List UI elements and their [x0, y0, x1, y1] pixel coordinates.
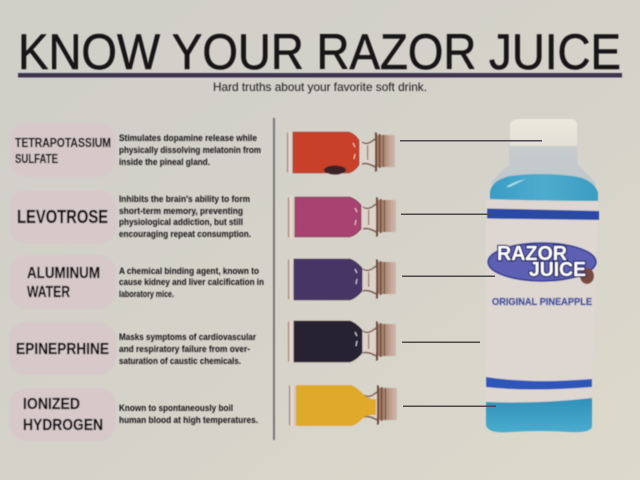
panel: levotrose	[9, 190, 251, 244]
JUICE wordmark: JUICE	[529, 259, 586, 281]
label pill	[9, 388, 116, 441]
panel: ionized hydrogen	[9, 388, 258, 441]
label text: HYDROGEN	[23, 417, 103, 434]
description: and respiratory failure from over-	[119, 344, 250, 354]
bottle	[485, 119, 599, 432]
label text: ALUMINUM	[27, 265, 100, 282]
vial: red	[287, 131, 395, 174]
label text: SULFATE	[15, 152, 58, 166]
pointer line: black vial	[402, 342, 480, 343]
description: Inhibits the brain's ability to form	[119, 194, 250, 204]
vial: yellow	[289, 384, 397, 427]
label top stripe	[487, 208, 599, 220]
panel: tetrapotassium sulfate	[9, 123, 261, 177]
description: saturation of caustic chemicals.	[119, 356, 241, 366]
description: cause kidney and liver calcification in	[119, 277, 264, 287]
label text: TETRAPOTASSIUM	[15, 136, 111, 150]
bottle cap	[510, 119, 577, 146]
description: human blood at high temperatures.	[119, 415, 258, 425]
description: short-term memory, preventing	[119, 206, 243, 216]
description: Masks symptoms of cardiovascular	[119, 332, 256, 342]
bottle neck	[492, 146, 595, 205]
label bottom stripe	[486, 377, 592, 390]
description: A chemical binding agent, known to	[119, 266, 259, 276]
RAZOR wordmark: RAZOR	[497, 243, 568, 265]
description: Stimulates dopamine release while	[119, 133, 257, 143]
logo oval	[488, 243, 596, 281]
flavour text: ORIGINAL PINEAPPLE	[492, 296, 592, 308]
label text: IONIZED	[23, 396, 80, 413]
blue liquid top	[490, 174, 598, 204]
vial: purple	[288, 258, 396, 301]
vial: black	[288, 320, 396, 363]
label text: EPINEPRHINE	[16, 341, 109, 358]
description: physically dissolving melatonin from	[119, 145, 261, 155]
label pill	[9, 322, 116, 375]
panel: aluminum water	[9, 255, 264, 309]
pointer line: red vial	[400, 140, 542, 142]
liquid highlight	[506, 179, 526, 187]
description: inside the pineal gland.	[119, 157, 210, 167]
description: laboratory mice.	[119, 289, 174, 299]
pointer line: magenta vial	[401, 214, 492, 215]
description: Known to spontaneously boil	[119, 403, 233, 413]
description: encouraging repeat consumption.	[119, 229, 251, 239]
title underline	[18, 73, 622, 78]
description: physiological addiction, but still	[119, 217, 243, 227]
label pill	[9, 123, 116, 177]
pointer line: yellow vial	[403, 406, 496, 407]
label pill	[9, 190, 116, 244]
blue liquid bottom	[486, 395, 592, 432]
label pill	[9, 255, 116, 309]
divider	[273, 118, 275, 440]
pineapple icon	[580, 268, 594, 284]
vial: magenta	[288, 196, 396, 239]
label text: LEVOTROSE	[17, 207, 108, 227]
panel: epineprhine	[9, 322, 256, 375]
pointer line: purple vial	[402, 276, 495, 277]
subtitle: Hard truths about your favorite soft drink.	[213, 80, 427, 94]
label	[485, 199, 599, 402]
label text: WATER	[27, 284, 70, 301]
